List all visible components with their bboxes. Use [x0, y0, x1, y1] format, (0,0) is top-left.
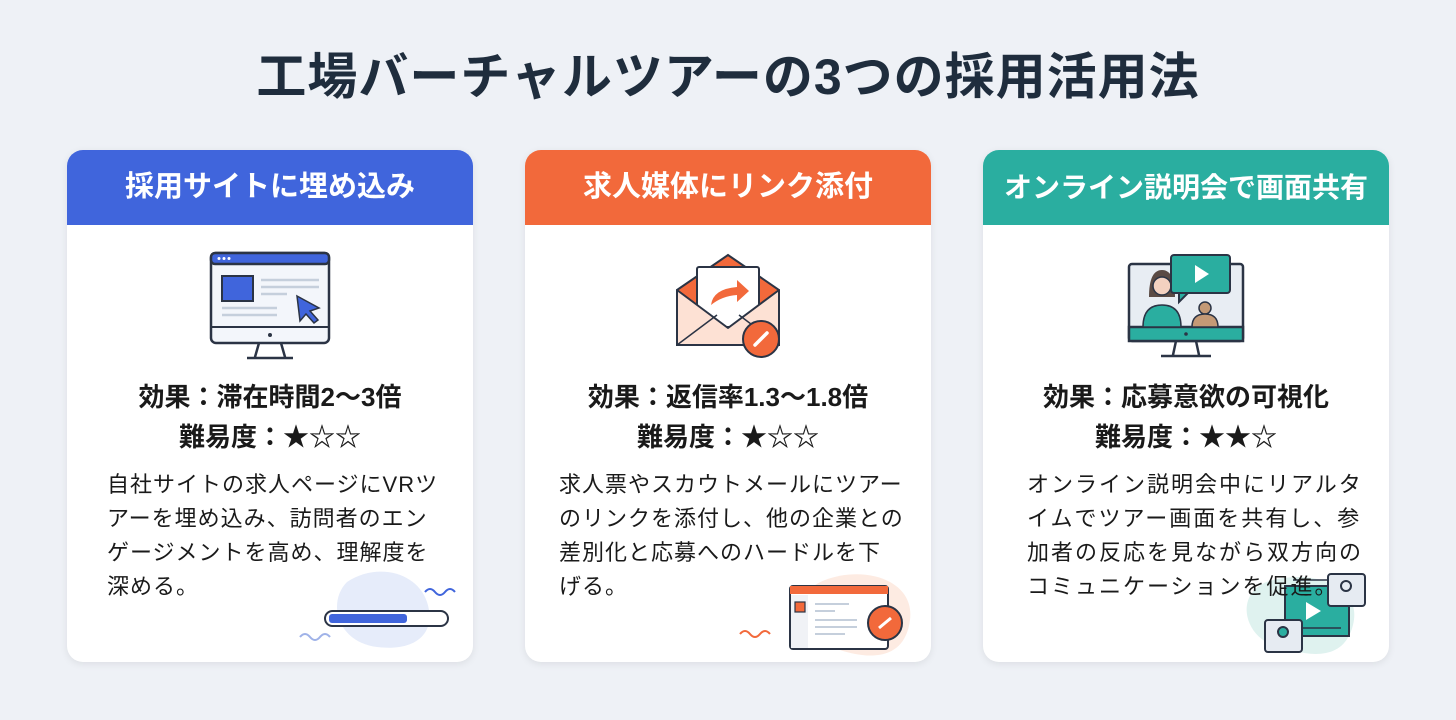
text: description: アーを埋め込み、訪問者のエン: [107, 506, 428, 531]
text: description: 差別化と応募へのハードルを下: [559, 540, 881, 565]
icon: envelope with link: [676, 254, 780, 358]
header: site embed: 採用サイトに埋め込み: [125, 171, 415, 203]
text: description: オンライン説明会中にリアルタ: [1027, 472, 1363, 497]
decoration: browser with link: [739, 574, 910, 656]
panel: online briefing: [983, 150, 1389, 662]
text: effect and difficulty: 難易度：★★☆: [1095, 422, 1277, 452]
text: effect and difficulty: 効果：応募意欲の可視化: [1043, 382, 1329, 412]
decoration: video network: [1246, 573, 1366, 654]
panel: site embed: [67, 150, 473, 662]
text: description: げる。: [559, 574, 628, 599]
text: effect and difficulty: 難易度：★☆☆: [179, 422, 361, 452]
header: job media link: 求人媒体にリンク添付: [583, 171, 873, 203]
panel: job media link: [525, 150, 931, 662]
text: description: 求人票やスカウトメールにツアー: [559, 472, 903, 497]
text: description: 深める。: [107, 574, 199, 599]
text: description: [1027, 472, 1363, 599]
header: site embed: [67, 150, 473, 225]
text: effect and difficulty: 効果：返信率1.3〜1.8倍: [588, 382, 868, 412]
text: effect and difficulty: [139, 382, 401, 452]
text: effect and difficulty: 難易度：★☆☆: [637, 422, 819, 452]
icon: video call monitor: [1128, 254, 1244, 358]
text: description: 加者の反応を見ながら双方向の: [1027, 540, 1363, 565]
text: description: イムでツアー画面を共有し、参: [1027, 506, 1361, 531]
text: description: ゲージメントを高め、理解度を: [107, 540, 429, 565]
text: description: 自社サイトの求人ページにVRツ: [107, 472, 438, 497]
header: online briefing: [983, 150, 1389, 225]
text: description: コミュニケーションを促進。: [1027, 574, 1339, 599]
text: effect and difficulty: [1043, 382, 1329, 452]
title: 工場バーチャルツアーの3つの採用活用法: [256, 49, 1200, 105]
text: description: のリンクを添付し、他の企業との: [559, 506, 904, 531]
text: effect and difficulty: 効果：滞在時間2〜3倍: [139, 382, 401, 412]
text: description: [107, 472, 438, 599]
text: description: [559, 472, 904, 599]
header: online briefing: オンライン説明会で画面共有: [1004, 172, 1368, 203]
icon: monitor with cursor: [210, 252, 330, 360]
header: job media link: [525, 150, 931, 225]
text: effect and difficulty: [588, 382, 868, 452]
decoration: progress bar: [299, 572, 456, 648]
